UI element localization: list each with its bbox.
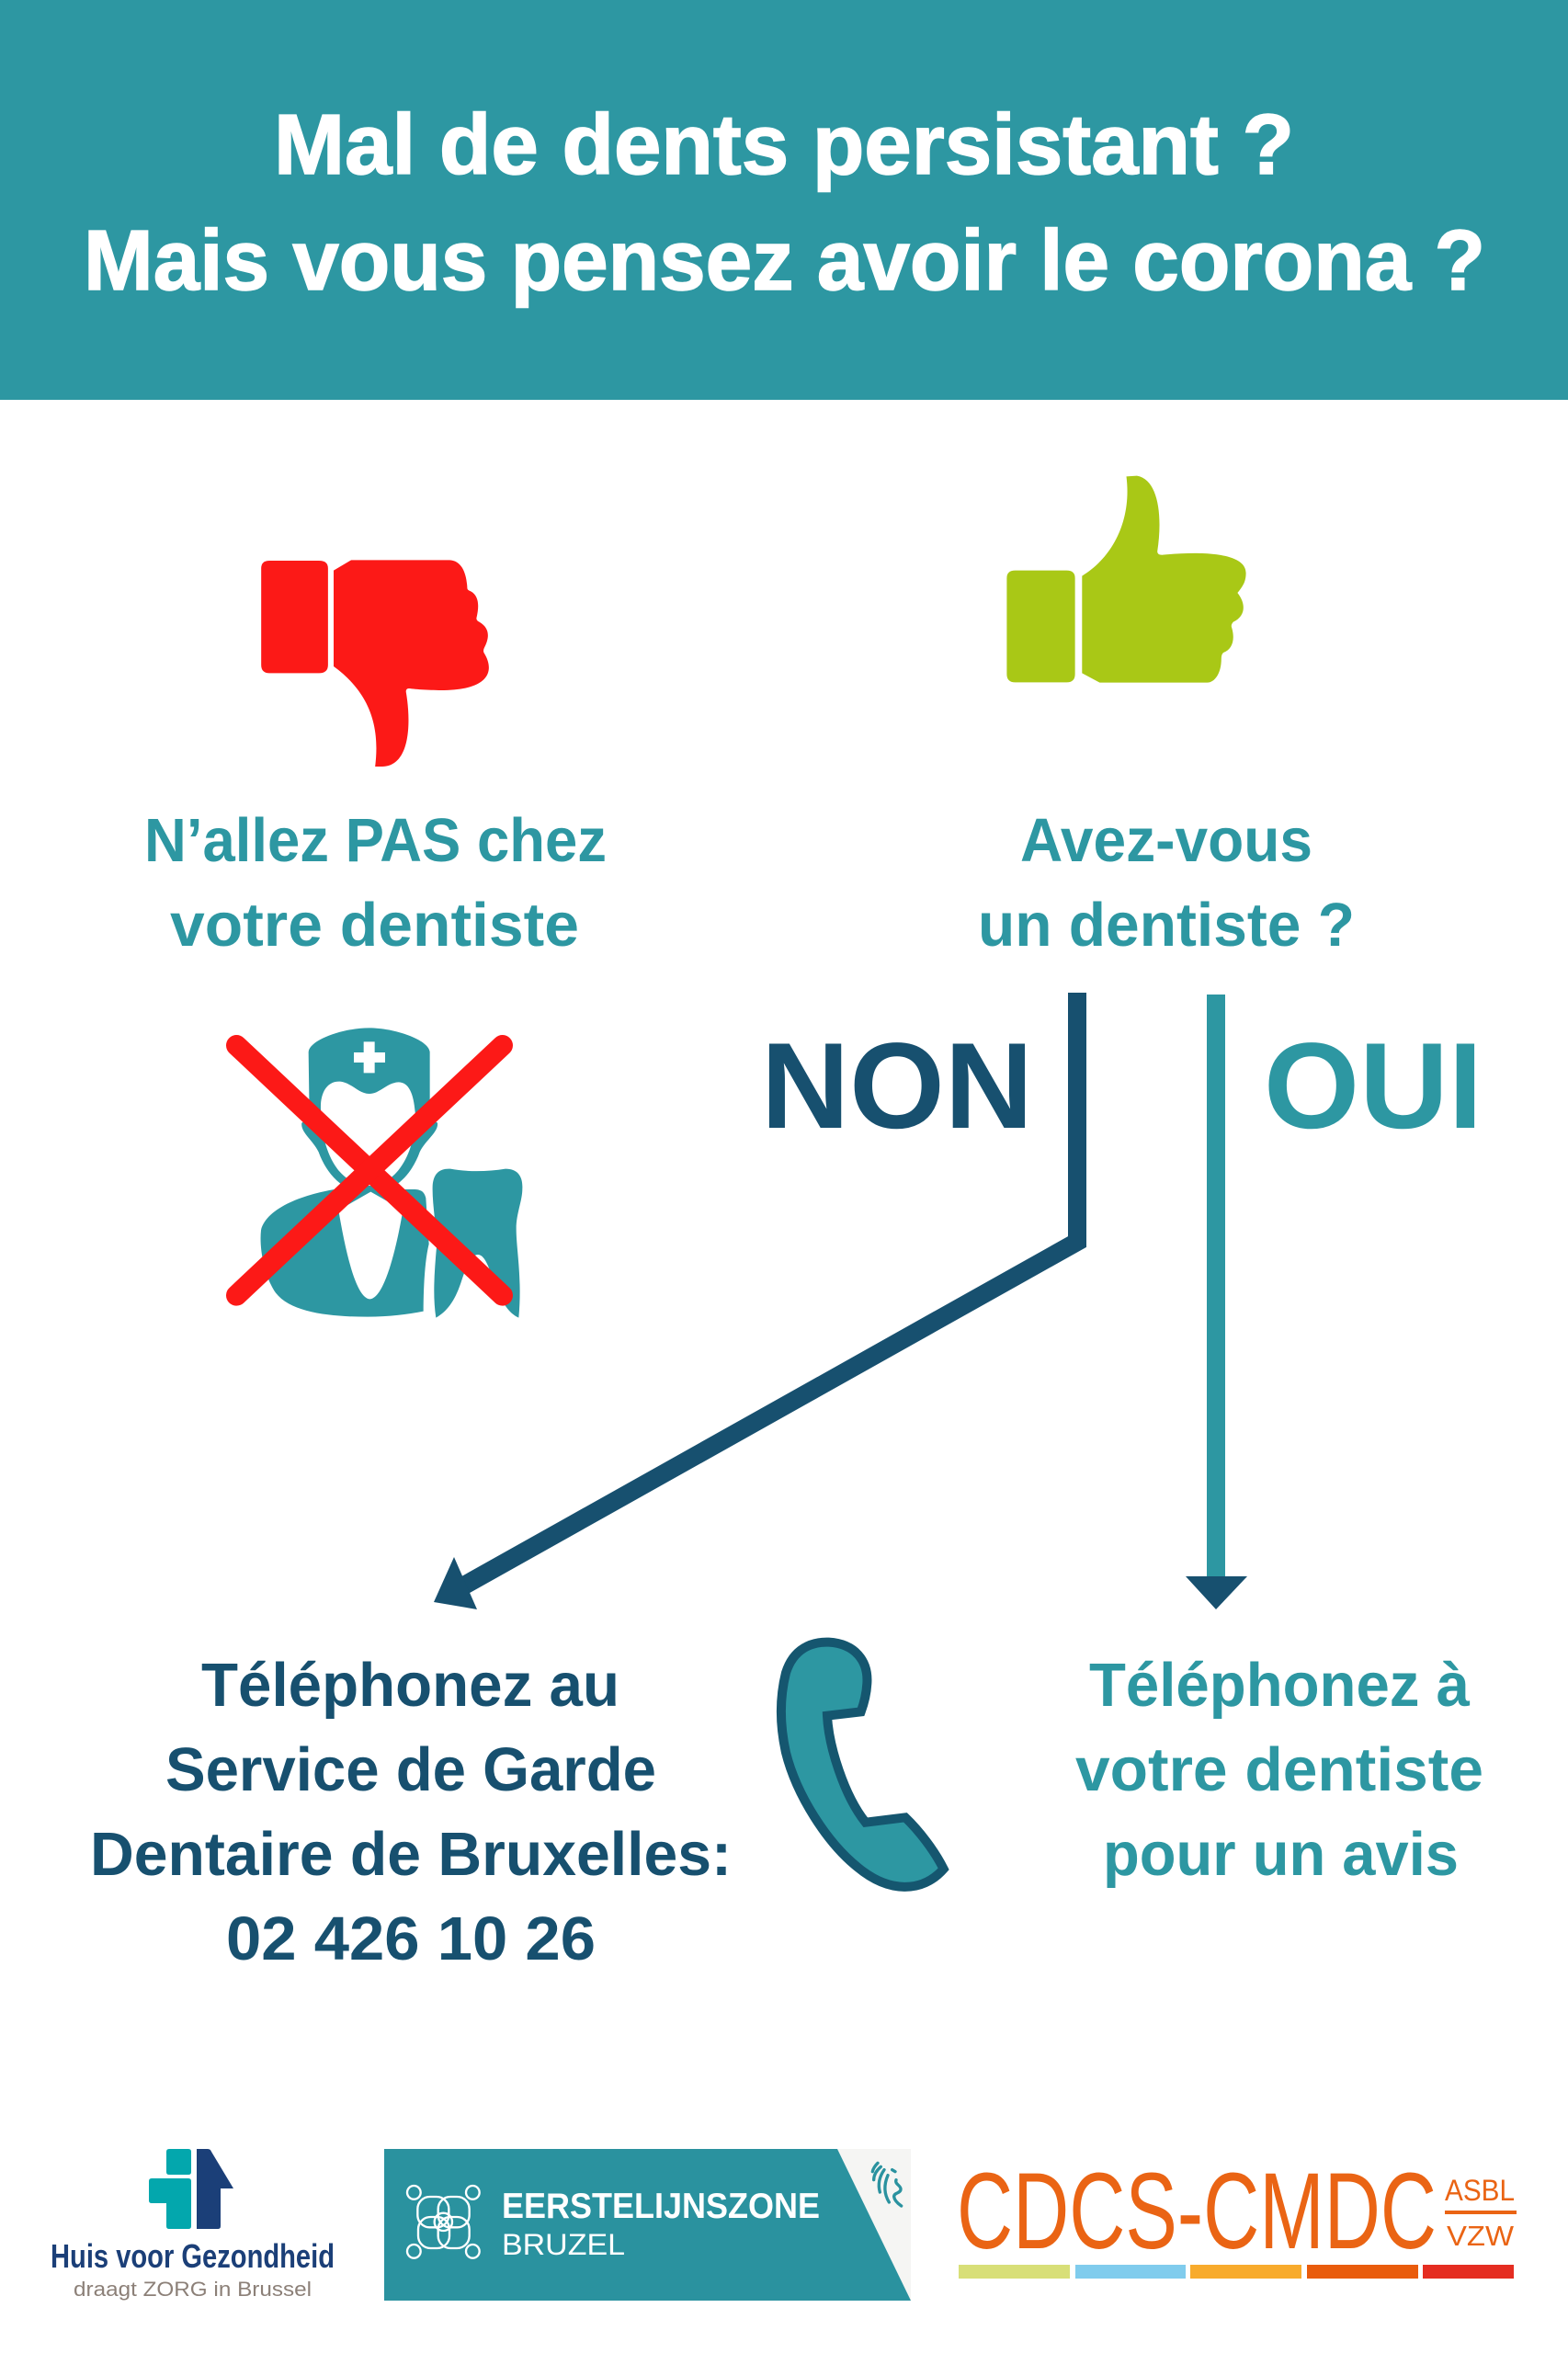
arrow: OUI path to own dentist: [1186, 995, 1247, 1609]
text: call dental emergency service: Service de Garde: [165, 1735, 656, 1804]
label: NON: NON: [761, 1018, 1033, 1154]
text: do not go to dentist: [144, 806, 607, 960]
text: do not go to dentist: votre dentiste: [170, 891, 579, 960]
header banner with title: Mais vous pensez avoir le corona ?: [84, 212, 1485, 308]
text: call your dentist for advice: pour un avis: [1103, 1820, 1459, 1889]
icon: red thumbs down: [261, 560, 489, 767]
text: do you have a dentist: Avez-vous: [1020, 806, 1312, 875]
header banner with title: Mal de dents persistant ?: [274, 97, 1294, 192]
logo: Huis voor Gezondheid: Huis voor Gezondheid: [51, 2237, 335, 2275]
icon: dentist crossed out: [236, 1028, 522, 1318]
icon: green thumbs up: [1006, 476, 1246, 683]
logo: Eerstelijnszone Bruzel: EERSTELIJNSZONE: [502, 2187, 820, 2226]
text: call dental emergency service: 02 426 10 26: [226, 1904, 596, 1973]
text: call dental emergency service: Téléphonez au: [201, 1651, 619, 1720]
text: call your dentist for advice: votre dentiste: [1075, 1735, 1483, 1804]
text: do not go to dentist: N’allez PAS chez: [144, 806, 607, 875]
arrow: NON path to emergency service: [434, 993, 1077, 1609]
logo: Eerstelijnszone Bruzel: BRUZEL: [502, 2228, 625, 2261]
logo: Huis voor Gezondheid: [51, 2149, 335, 2301]
icon: Flemish lion: [872, 2163, 902, 2206]
logo: CDCS-CMDC: VZW: [1447, 2220, 1515, 2252]
text: call your dentist for advice: [1075, 1651, 1483, 1889]
icon: network of linked circles: [407, 2186, 480, 2258]
text: call dental emergency service: Dentaire de Bruxelles:: [90, 1820, 732, 1889]
header banner with title: [0, 0, 1568, 400]
text: call your dentist for advice: Téléphonez à: [1089, 1651, 1471, 1720]
logo: Huis voor Gezondheid: draagt ZORG in Brussel: [74, 2278, 312, 2301]
text: call dental emergency service: [90, 1651, 732, 1973]
label: OUI: OUI: [1264, 1018, 1483, 1154]
icon: telephone handset: [781, 1643, 944, 1887]
text: do you have a dentist: [978, 806, 1355, 960]
text: do you have a dentist: un dentiste ?: [978, 891, 1355, 960]
logo: CDCS-CMDC: ASBL: [1445, 2174, 1515, 2207]
logo: Eerstelijnszone Bruzel: [384, 2149, 911, 2301]
